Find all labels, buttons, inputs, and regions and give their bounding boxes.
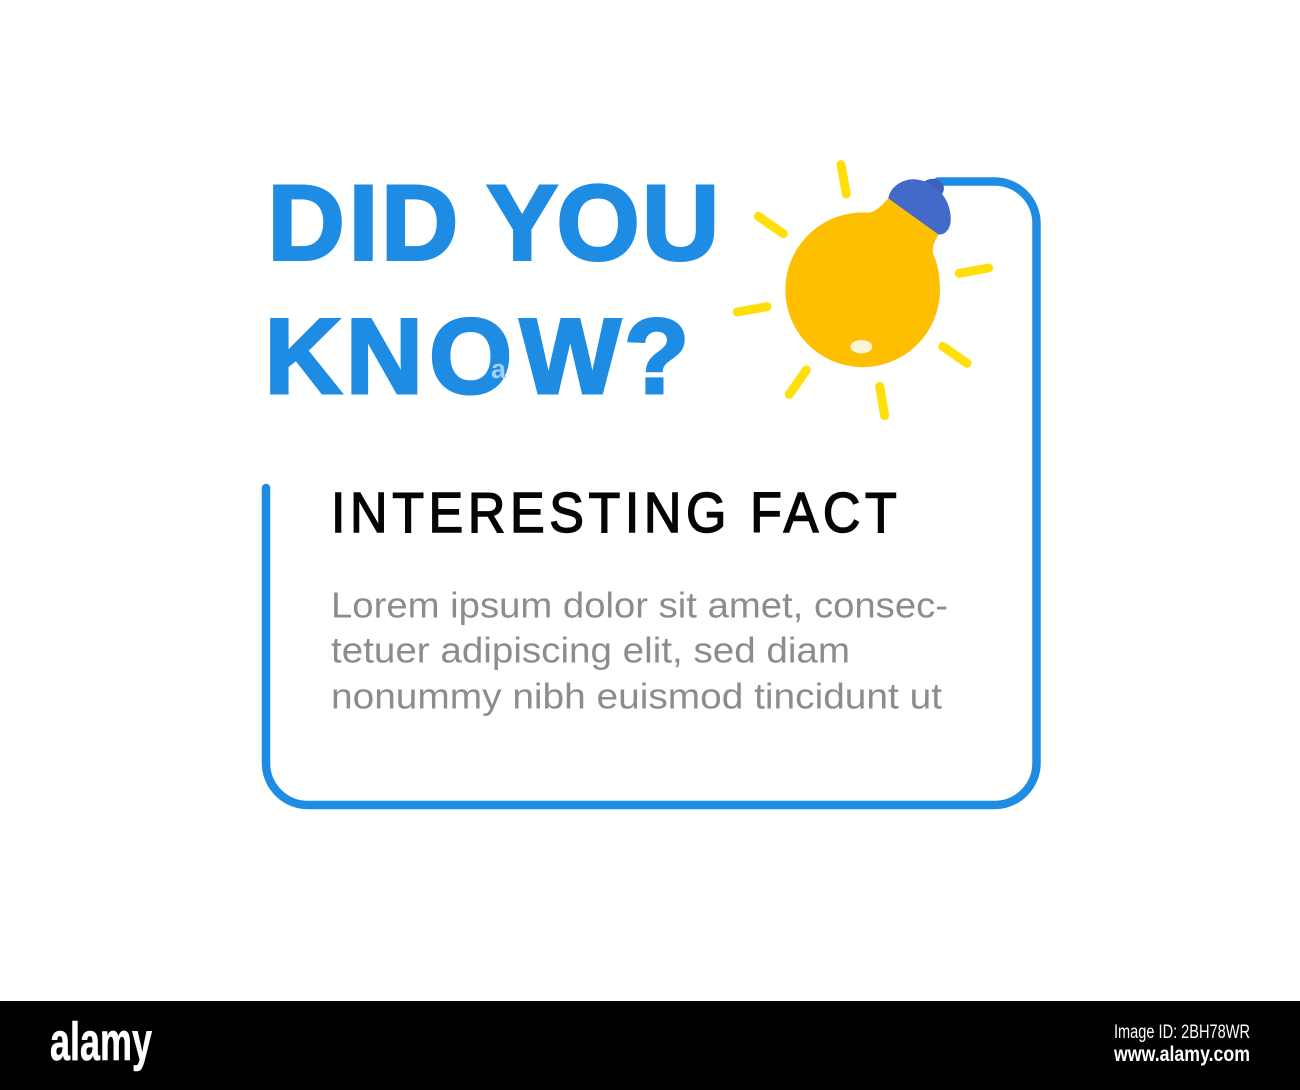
icon: bulb highlight <box>850 340 872 353</box>
icon: bulb glass <box>785 193 943 367</box>
body text: nonummy nibh euismod tincidunt ut <box>331 675 942 716</box>
icon: light bulb <box>737 165 989 416</box>
title: did you know <box>264 162 719 416</box>
title: did you know: KNOW? <box>264 296 689 416</box>
icon: light rays <box>737 165 989 416</box>
footer image id: Image ID: 2BH78WR <box>1114 1022 1250 1043</box>
body text <box>331 584 948 716</box>
watermark footer band <box>0 1001 1300 1090</box>
body text: tetuer adipiscing elit, sed diam <box>331 630 850 671</box>
frame outline <box>266 182 1036 805</box>
footer logo: alamy <box>50 1012 152 1072</box>
icon: bulb knob <box>924 179 944 196</box>
title: did you know: DID YOU <box>268 162 719 282</box>
footer url: www.alamy.com <box>1113 1043 1250 1066</box>
icon: bulb cap <box>888 179 951 234</box>
watermark glyph on title: a <box>491 354 507 384</box>
body text: Lorem ipsum dolor sit amet, consec- <box>331 584 948 626</box>
heading: interesting fact: INTERESTING FACT <box>331 481 897 544</box>
